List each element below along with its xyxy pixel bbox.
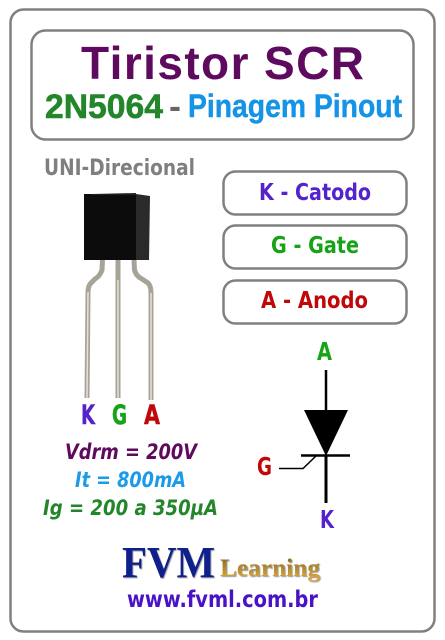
spec: Ig: Ig = 200 a 350µA (43, 496, 218, 520)
pin box: Catodo: K - Catodo (259, 180, 371, 206)
lead K (87, 260, 102, 398)
heading: Tiristor SCR: Tiristor SCR (81, 37, 364, 89)
pin box: Anodo: A - Anodo (261, 288, 368, 314)
subtitle: part number: 2N5064 (45, 88, 163, 126)
symbol label K: K (320, 505, 335, 534)
label: UNI-Direcional: UNI-Direcional (44, 156, 195, 181)
logo: FVM: FVM (122, 538, 215, 587)
spec: Vdrm: Vdrm = 200V (65, 440, 198, 464)
pin box: Anodo (224, 280, 406, 324)
cathode lead (324, 455, 328, 503)
subtitle: dash: - (169, 88, 181, 126)
transistor body (84, 194, 137, 260)
logo (122, 538, 321, 587)
lead A (134, 260, 151, 400)
pin label A: A (144, 400, 160, 431)
pin box: Catodo (224, 172, 406, 214)
anode lead (325, 370, 327, 412)
pin box: Gate: G - Gate (271, 233, 359, 259)
symbol label A: A (317, 337, 332, 366)
spec: It: It = 800mA (75, 468, 186, 492)
gate lead (279, 456, 316, 468)
symbol label G: G (257, 452, 272, 481)
subtitle: Pinagem Pinout: Pinagem Pinout (188, 88, 402, 124)
diode triangle (304, 410, 348, 456)
cathode bar (301, 454, 350, 457)
logo: Learning: Learning (220, 555, 321, 582)
transistor image (84, 193, 151, 400)
pin label G: G (112, 400, 127, 431)
pin box: Gate (224, 226, 406, 268)
website URL: www.fvml.com.br (127, 587, 319, 613)
SCR symbol (279, 370, 350, 503)
pin label K: K (81, 400, 96, 431)
panel: title (32, 30, 414, 140)
lead G (116, 260, 120, 398)
